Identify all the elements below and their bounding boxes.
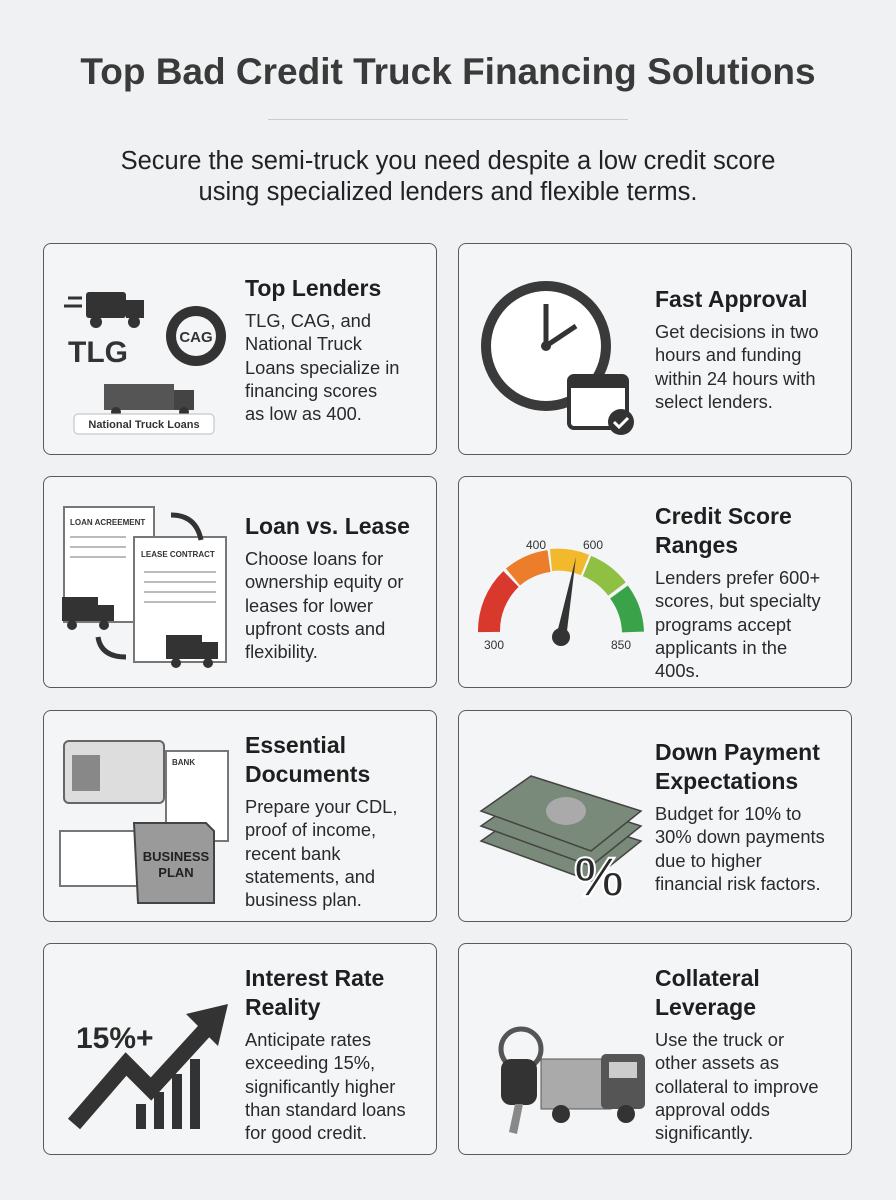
text: interest rate reality: Interest Rate <box>245 965 384 991</box>
text: essential documents: Documents <box>245 761 370 787</box>
icon: lender logos: CAG <box>179 329 213 346</box>
icon: lender logos: TLG <box>68 336 128 369</box>
text: essential documents: proof of income, <box>245 819 376 840</box>
text: collateral leverage: approval odds <box>655 1099 770 1120</box>
text: interest rate reality: for good credit. <box>245 1122 367 1143</box>
text: loan vs lease: Loan vs. Lease <box>245 513 410 539</box>
icon: loan and lease documents: LEASE CONTRACT <box>141 550 215 559</box>
icon: lender logos: National Truck Loans <box>88 419 200 431</box>
text: top lenders: National Truck <box>245 333 362 354</box>
subtitle <box>121 147 775 206</box>
text: top lenders: Top Lenders <box>245 275 381 301</box>
icon: documents and folder: BANK <box>172 758 195 767</box>
text: essential documents <box>245 732 397 910</box>
panel: collateral leverage <box>458 943 852 1155</box>
text: essential documents: statements, and <box>245 866 375 887</box>
text: essential documents: recent bank <box>245 843 341 864</box>
icon: documents and folder: BUSINESS <box>143 849 210 864</box>
text: collateral leverage: collateral to improve <box>655 1076 819 1097</box>
text: top lenders <box>245 275 399 424</box>
text: loan vs lease: upfront costs and <box>245 618 385 639</box>
text: loan vs lease: ownership equity or <box>245 571 404 592</box>
icon: cash stack with percent <box>480 775 642 906</box>
icon: loan and lease documents <box>62 506 227 668</box>
text: collateral leverage: Collateral <box>655 965 760 991</box>
text: credit score ranges <box>655 503 821 681</box>
icon: lender logos <box>64 292 226 434</box>
icon: documents and folder: PLAN <box>158 865 194 880</box>
text: interest rate reality: Reality <box>245 994 320 1020</box>
icon: credit score gauge <box>478 538 644 652</box>
text: top lenders: Loans specialize in <box>245 357 399 378</box>
text: collateral leverage: significantly. <box>655 1122 753 1143</box>
text: loan vs lease <box>245 513 410 662</box>
panel: down payment expectations <box>458 710 852 922</box>
text: fast approval <box>655 286 819 412</box>
icon: credit score gauge: 600 <box>583 538 603 552</box>
icon: clock and calendar <box>481 281 634 435</box>
text: fast approval: Get decisions in two <box>655 321 819 342</box>
text: collateral leverage <box>655 965 819 1143</box>
text: credit score ranges: Ranges <box>655 532 738 558</box>
text: loan vs lease: flexibility. <box>245 641 318 662</box>
text: credit score ranges: scores, but specialty <box>655 590 821 611</box>
text: essential documents: business plan. <box>245 889 362 910</box>
text: essential documents: Prepare your CDL, <box>245 796 397 817</box>
icon: rising arrow chart <box>68 1004 228 1130</box>
text: fast approval: hours and funding <box>655 344 801 365</box>
text: top lenders: financing scores <box>245 380 377 401</box>
text: loan vs lease: Choose loans for <box>245 548 383 569</box>
text: interest rate reality <box>245 965 406 1143</box>
text: top lenders: TLG, CAG, and <box>245 310 371 331</box>
panel: credit score ranges <box>458 476 852 688</box>
text: credit score ranges: programs accept <box>655 614 791 635</box>
text: collateral leverage: Use the truck or <box>655 1029 784 1050</box>
icon: loan and lease documents: LOAN ACREEMENT <box>70 518 145 527</box>
text: collateral leverage: other assets as <box>655 1052 779 1073</box>
text: credit score ranges: Credit Score <box>655 503 792 529</box>
text: credit score ranges: applicants in the <box>655 637 787 658</box>
title: Top Bad Credit Truck Financing Solutions <box>80 51 816 92</box>
panel: top lenders <box>43 243 437 455</box>
text: top lenders: as low as 400. <box>245 403 362 424</box>
icon: credit score gauge: 850 <box>611 638 631 652</box>
icon: key and truck <box>498 1026 645 1134</box>
panel: fast approval <box>458 243 852 455</box>
text: fast approval: Fast Approval <box>655 286 808 312</box>
text: down payment expectations: Budget for 10% to <box>655 803 801 824</box>
icon: credit score gauge: 400 <box>526 538 546 552</box>
text: down payment expectations: financial risk factors. <box>655 873 821 894</box>
panel: loan vs lease <box>43 476 437 688</box>
icon: credit score gauge: 300 <box>484 638 504 652</box>
text: essential documents: Essential <box>245 732 346 758</box>
text: interest rate reality: exceeding 15%, <box>245 1052 375 1073</box>
text: credit score ranges: 400s. <box>655 660 700 681</box>
text: down payment expectations <box>655 739 825 894</box>
text: down payment expectations: Expectations <box>655 768 798 794</box>
text: down payment expectations: due to higher <box>655 850 762 871</box>
text: interest rate reality: Anticipate rates <box>245 1029 371 1050</box>
icon: rising arrow chart: 15%+ <box>76 1022 154 1055</box>
text: down payment expectations: Down Payment <box>655 739 820 765</box>
panel: interest rate reality <box>43 943 437 1155</box>
text: interest rate reality: than standard loans <box>245 1099 406 1120</box>
text: loan vs lease: leases for lower <box>245 595 373 616</box>
text: fast approval: select lenders. <box>655 391 773 412</box>
text: credit score ranges: Lenders prefer 600+ <box>655 567 820 588</box>
panel: essential documents <box>43 710 437 922</box>
text: interest rate reality: significantly higher <box>245 1076 395 1097</box>
subtitle: Secure the semi-truck you need despite a low credit score <box>121 147 775 175</box>
icon: documents and folder <box>59 740 229 904</box>
text: collateral leverage: Leverage <box>655 994 756 1020</box>
text: fast approval: within 24 hours with <box>655 368 816 389</box>
text: down payment expectations: 30% down payments <box>655 826 825 847</box>
subtitle: using specialized lenders and flexible terms. <box>199 178 697 206</box>
